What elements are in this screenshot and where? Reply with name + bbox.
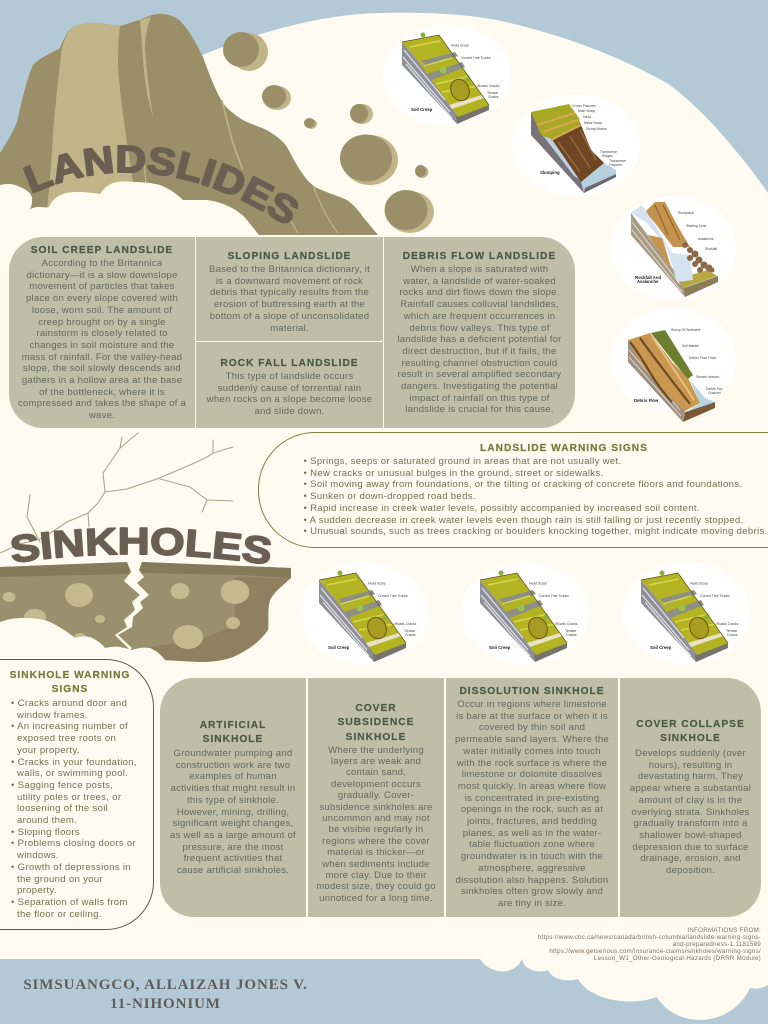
text: sloping: debris that typically results from the	[210, 287, 369, 298]
diagram: soil creep: Soil Creep	[411, 107, 433, 112]
text: dissolution: water initially comes into touch	[463, 746, 601, 757]
heading: cover collapse: COVER COLLAPSE	[636, 719, 745, 730]
text: rock fall: This type of landslide occurs	[226, 371, 353, 382]
list: sinkhole warning signs: utility poles or trees, or	[17, 792, 121, 803]
list: sinkhole warning signs: • Cracks in your foundation,	[11, 757, 137, 768]
text: cover subsidence: be visible regularly in	[329, 824, 423, 835]
diagram: soil creep: Curved Tree Trunks	[461, 56, 491, 60]
text: dissolution: atmosphere, aggressive	[478, 863, 586, 874]
heading: sinkhole warning signs: SIGNS	[52, 684, 88, 695]
text: artificial: However, mining, drilling,	[177, 807, 289, 818]
diagram: rockfall and avalanche: Avalanche	[637, 279, 659, 284]
text: sloping: is a downward movement of rock	[216, 276, 363, 287]
panel: cover subsidence sinkhole	[308, 678, 444, 917]
boulders	[223, 32, 434, 233]
list: sinkhole warning signs: • Separation of walls from	[11, 897, 128, 908]
list: landslide warning signs	[304, 456, 768, 537]
diagram: debris flow: Channel	[708, 391, 721, 395]
diagram: rockfall and avalanche: Rockfall	[705, 247, 717, 251]
text: debris flow	[397, 264, 562, 415]
text: artificial: pressure, are the most	[182, 842, 284, 853]
text: dissolution: planes, as well as in the water-	[463, 828, 601, 839]
text: cover subsidence: when sediments include	[322, 859, 430, 870]
list: sinkhole warning signs: • Sagging fence posts,	[11, 780, 113, 791]
heading: rock fall: ROCK FALL LANDSLIDE	[220, 358, 359, 369]
text: rock fall: and slide down.	[254, 406, 325, 417]
text: dissolution: is concentrated in pre-existing	[465, 793, 599, 804]
heading: artificial: SINKHOLE	[203, 734, 263, 745]
cloud under ground	[0, 618, 170, 670]
diagram: sinkhole block 2: Cracks	[566, 633, 577, 637]
heading: landslide warning signs: LANDSLIDE WARNING SIGNS	[480, 443, 648, 454]
list: landslide warning signs: • Springs, seeps or saturated ground in areas that are not usually wet.	[304, 456, 621, 467]
text: cover subsidence: material is thicker—or	[327, 847, 425, 858]
diagram: slumping: Fissures	[609, 163, 622, 167]
text: author credit: 11-NIHONIUM	[110, 996, 221, 1012]
text: cover subsidence: uncommon and may not	[322, 813, 430, 824]
diagram: sinkhole block 1: Head Scarp	[368, 582, 386, 586]
diagram: sinkhole block 2: Terrace	[565, 629, 576, 633]
diagram: rockfall and avalanche: Snowpack	[678, 211, 694, 215]
panel: rock fall landslide	[196, 342, 383, 428]
list: sinkhole warning signs: walls, or swimming pool.	[17, 768, 128, 779]
diagram: sinkhole block 1: Soil Creep	[328, 645, 350, 650]
list: landslide warning signs: • Rapid increase in creek water levels, possibly accompanied by increased soil content.	[304, 503, 700, 514]
panel: artificial sinkhole	[160, 678, 306, 917]
text: dissolution: sinkholes often grow slowly and	[461, 886, 603, 897]
text: soil creep: loose, worn soil. The amount of	[32, 305, 172, 316]
list: sinkhole warning signs: window frames.	[17, 710, 88, 721]
heading: sinkhole warning signs	[10, 670, 130, 695]
text: dissolution: with the rock surface is where the	[457, 758, 607, 769]
cloud over mountain base	[0, 181, 259, 240]
diagram: sinkhole block 3: Soil Creep	[650, 645, 672, 650]
text: cover subsidence: gradually. Cover-	[338, 790, 414, 801]
illustration: sinkhole ground with cracks and title	[0, 432, 291, 662]
text: rock fall	[206, 371, 372, 417]
text: cover subsidence: layers are weak and	[331, 756, 421, 767]
diagram: sinkhole block 1: Cracks	[405, 633, 416, 637]
text: cover collapse: deposition.	[666, 865, 715, 876]
text: cover collapse: shallower bowl-shaped	[639, 830, 742, 841]
diagram: slumping: Minor Scarp	[584, 121, 602, 125]
diagram: sinkhole block 2: Head Scarp	[529, 582, 547, 586]
text: artificial: frequent activities that	[184, 853, 282, 864]
text: dissolution: permeable sand layers. Where the	[455, 734, 609, 745]
diagrams: four landslide types and three sinkhole blocks	[300, 24, 750, 664]
list: sinkhole warning signs: • An increasing number of	[11, 721, 128, 732]
diagram: soil creep	[383, 24, 511, 126]
diagram: soil creep: Terrace	[487, 91, 498, 95]
diagram: slumping	[512, 94, 640, 196]
text: soil creep: of the bottleneck, where it is	[39, 387, 165, 398]
text: sloping: Based to the Britannica dictionary, it	[209, 264, 370, 275]
diagram: debris flow: Debris Flow	[634, 398, 659, 403]
text: debris flow: water, a landslide of water-soaked	[403, 276, 556, 287]
text: artificial: activities that might result in	[171, 783, 295, 794]
diagram: slumping: Slumping	[540, 170, 560, 175]
heading: cover collapse	[636, 719, 745, 744]
diagram: sinkhole block 1: Terrace	[404, 629, 415, 633]
text: soil creep: movement of particles that takes	[29, 281, 175, 292]
text: cover subsidence: subsidence sinkholes are	[319, 802, 433, 813]
mountain	[0, 14, 378, 235]
text: sources: and-preparedness-1.1181599	[673, 941, 761, 948]
diagram: sinkhole block 3: Terrace	[726, 629, 737, 633]
diagram: soil creep: Roads Cracks	[478, 84, 500, 88]
diagram: sinkhole block 3: Head Scarp	[690, 582, 708, 586]
text: dissolution: Occur in regions where limestone	[457, 699, 607, 710]
diagram: debris flow: Stream Incision	[696, 375, 719, 379]
text: cover collapse: gradually transform into a	[633, 818, 748, 829]
text: author credit	[23, 977, 308, 1012]
text: sources: INFORMATIONS FROM:	[687, 926, 761, 934]
list: sinkhole warning signs	[11, 698, 137, 920]
text: sloping: material.	[270, 323, 309, 334]
heading: cover subsidence	[338, 703, 414, 743]
text: rock fall: when rocks on a slope become loose	[207, 394, 372, 405]
text: rock fall: suddenly cause of torrential rain	[218, 383, 361, 394]
heading: sinkhole warning signs: SINKHOLE WARNING	[10, 670, 130, 680]
title: Sinkholes: SINKHOLES	[11, 527, 271, 564]
diagram: debris flow: Debris Fan	[706, 387, 723, 391]
panel: debris flow landslide	[384, 237, 575, 428]
text: cover collapse: Develops suddenly (over	[635, 748, 746, 759]
text: soil creep: gathers in a hollow area at the base	[22, 375, 182, 386]
list: sinkhole warning signs: your property.	[17, 745, 80, 756]
text: sloping: bottom of a slope of unconsolidated	[210, 311, 369, 322]
text: debris flow: debris flow valleys. This type of	[409, 323, 550, 334]
text: cover collapse: depression due to surface	[632, 842, 749, 853]
diagram: sinkhole block 2	[461, 562, 589, 664]
diagram: slumping: Ridges	[602, 154, 613, 158]
text: sloping: erosion of buttressing earth at the	[214, 299, 365, 310]
text: soil creep: changes in soil moisture and the	[30, 340, 174, 351]
panel: landslide warning signs	[258, 432, 768, 548]
list: sinkhole warning signs: loosening of the soil	[17, 803, 108, 814]
heading: dissolution: DISSOLUTION SINKHOLE	[459, 686, 605, 697]
heading: soil creep: SOIL CREEP LANDSLIDE	[31, 245, 173, 256]
text: dissolution: is bare at the surface or when it is	[456, 711, 608, 722]
diagram: sinkhole block 2: Curved Tree Trunks	[539, 594, 569, 598]
list: sinkhole warning signs: exposed tree roots on	[17, 733, 116, 744]
text: debris flow: resulting channel obstruction could	[402, 358, 557, 369]
heading: artificial	[200, 720, 266, 745]
text: dissolution: groundwater is in touch with the	[461, 851, 603, 862]
text: cover subsidence: contain sand,	[346, 767, 406, 778]
text: dissolution: limestone or dolomite dissolves	[462, 769, 602, 780]
text: artificial: cause artificial sinkholes.	[177, 865, 289, 876]
text: debris flow: result in several amplified secondary	[398, 369, 561, 380]
text: soil creep: creep brought on by a single	[38, 317, 166, 328]
diagram: slumping: Crown Fissures	[572, 104, 596, 108]
text: soil creep: place on every slope covered with	[26, 293, 178, 304]
text: author credit: SIMSUANGCO, ALLAIZAH JONES V.	[23, 977, 308, 993]
diagram: rockfall and avalanche: Starting Zone	[686, 224, 706, 228]
list: sinkhole warning signs: the ground on your	[17, 874, 103, 885]
panel: soil creep landslide	[9, 237, 195, 428]
list: landslide warning signs: • Unusual sounds, such as trees cracking or boulders knocking together, might indicate moving debris.	[304, 526, 768, 537]
text: debris flow: When a slope is saturated with	[411, 264, 548, 275]
diagram: slumping: Head	[583, 115, 591, 119]
text: debris flow: landslide has a deficient potential for	[397, 334, 562, 345]
text: sources: https://www.getserious.com/insurance-claims/sinkholes/warning-signs/	[549, 948, 761, 955]
text: cover collapse: drainage, erosion, and	[640, 853, 741, 864]
heading: cover subsidence: SUBSIDENCE	[338, 717, 414, 728]
title: Landslides: LANDSLIDES	[22, 145, 298, 224]
text: soil creep: rainstorm is closely related to	[36, 328, 168, 339]
heading: cover subsidence: COVER	[355, 703, 397, 714]
diagram: slumping: Transverse	[609, 159, 626, 163]
text: debris flow: impact of rainfall on this type of	[409, 393, 550, 404]
heading: debris flow: DEBRIS FLOW LANDSLIDE	[403, 251, 556, 262]
text: dissolution: covered by thin soil and	[479, 722, 585, 733]
text: debris flow: landslide is crucial for this cause.	[405, 404, 554, 415]
text: artificial	[170, 748, 296, 876]
diagram: rockfall and avalanche: Avalanche	[698, 237, 714, 241]
diagram: sinkhole block 3: Cracks	[727, 633, 738, 637]
diagram: debris flow: Soil Mantle	[682, 344, 699, 348]
ground	[0, 562, 291, 662]
list: sinkhole warning signs: • Problems closing doors or	[11, 838, 136, 849]
heading: cover subsidence: SINKHOLE	[346, 732, 406, 743]
text: artificial: significant weight changes,	[173, 818, 293, 829]
list: sinkhole warning signs: windows.	[17, 850, 59, 861]
text: artificial: Groundwater pumping and	[174, 748, 292, 759]
text: soil creep: dictionary—it is a slow downslope	[26, 270, 178, 281]
diagram: slumping: Main Scarp	[578, 109, 595, 113]
text: sources: Lesson_W1_Other-Geological-Hazards (DRRR Module)	[594, 955, 761, 962]
text: cover subsidence: unnoticed for a long time.	[319, 893, 433, 904]
illustration: landslide mountain with boulders	[0, 14, 434, 235]
text: dissolution: openings in the rock, such as at	[461, 804, 603, 815]
text: cover collapse: overlying strata. Sinkholes	[631, 807, 750, 818]
diagram: sinkhole block 2: Roads Cracks	[556, 622, 578, 626]
list: landslide warning signs: • Sunken or down-dropped road beds.	[304, 491, 476, 502]
text: debris flow: Rainfall causes colluvial landslides,	[400, 299, 559, 310]
text: soil creep: compressed and takes the shape of a	[18, 398, 186, 409]
text: sources: https://www.cbc.ca/news/canada/british-columbia/landslide-warning-signs-	[538, 934, 761, 941]
panel: cover collapse sinkhole	[620, 678, 761, 917]
heading: artificial: ARTIFICIAL	[200, 720, 266, 731]
list: sinkhole warning signs: around them.	[17, 815, 77, 826]
diagram: sinkhole block 1: Curved Tree Trunks	[378, 594, 408, 598]
diagram: sinkhole block 2: Soil Creep	[489, 645, 511, 650]
diagram: debris flow: Slump Of Sediment	[671, 328, 700, 332]
text: cover subsidence: modest size, they could go	[316, 881, 436, 892]
text: debris flow: rocks and dirt flows down the slope.	[399, 287, 560, 298]
diagram: sinkhole block 3: Roads Cracks	[717, 622, 739, 626]
diagram: soil creep: Head Scarp	[451, 44, 469, 48]
panel: dissolution sinkhole	[446, 678, 618, 917]
text: artificial: this type of sinkhole.	[187, 795, 279, 806]
text: soil creep: slope, the soil slowly descends and	[23, 363, 181, 374]
diagram: soil creep: Cracks	[488, 95, 499, 99]
panel: sinkhole warning signs	[0, 659, 154, 930]
text: sources	[538, 926, 761, 962]
text: cover subsidence: Where the underlying	[328, 744, 424, 756]
text: artificial: as well as a large amount of	[170, 830, 296, 841]
diagram: sinkhole block 3: Curved Tree Trunks	[700, 594, 730, 598]
text: dissolution: table fluctuation zone where	[469, 839, 595, 850]
text: dissolution: dissolution also happens. Solution	[456, 875, 608, 886]
list: sinkhole warning signs: property.	[17, 885, 57, 896]
panel: sloping landslide	[196, 237, 383, 341]
text: artificial: construction work are two	[176, 760, 290, 771]
diagram: debris flow	[610, 308, 736, 422]
diagram: sinkhole block 1: Roads Cracks	[395, 622, 417, 626]
list: landslide warning signs: • New cracks or unusual bulges in the ground, street or sidewalks.	[304, 468, 603, 479]
text: debris flow: dangers. Investigating the potential	[401, 381, 558, 392]
diagram: debris flow: Debris Flow Track	[689, 356, 716, 360]
list: landslide warning signs: • Soil moving away from foundations, or the tilting or cracking of concrete floors and foundations.	[304, 479, 742, 490]
text: cover collapse	[630, 748, 751, 876]
heading: cover collapse: SINKHOLE	[660, 733, 721, 744]
text: cover collapse: amount of clay is in the	[639, 795, 742, 806]
text: dissolution: joints, fractures, and bedding	[467, 816, 597, 827]
text: cover subsidence	[316, 744, 436, 904]
text: soil creep: According to the Britannica	[42, 258, 162, 269]
diagram: sinkhole block 1	[300, 562, 428, 664]
diagram: sinkhole block 3	[622, 562, 750, 664]
text: dissolution	[455, 699, 609, 909]
diagram: rockfall and avalanche	[610, 196, 736, 300]
diagram: slumping: Transverse	[600, 150, 617, 154]
text: cover subsidence: regions where the cover	[322, 836, 430, 847]
diagram: rockfall and avalanche: Rockfall And	[635, 275, 661, 280]
text: cover subsidence: more clay. Due to their	[325, 870, 427, 881]
list: sinkhole warning signs: • Growth of depressions in	[11, 862, 131, 873]
text: sloping	[209, 264, 370, 334]
text: soil creep	[18, 258, 186, 421]
text: soil creep: wave.	[89, 410, 115, 421]
text: dissolution: are tiny in size.	[498, 898, 566, 909]
list: sinkhole warning signs: • Cracks around door and	[11, 698, 127, 709]
diagram: slumping: Slump Blocks	[586, 127, 607, 131]
text: cover subsidence: development occurs	[331, 779, 421, 790]
text: cover collapse: hours), resulting in	[649, 760, 732, 771]
text: dissolution: most quickly. In areas where flow	[458, 781, 606, 792]
text: debris flow: direct destruction, but if it fails, the	[402, 346, 557, 357]
list: sinkhole warning signs: the floor or ceiling.	[17, 909, 102, 920]
text: soil creep: mass of rainfall. For the valley-head	[22, 352, 182, 363]
list: landslide warning signs: • A sudden decrease in creek water levels even though rain is still falling or just recently stopped.	[304, 515, 744, 526]
text: debris flow: which are frequent occurrences in	[404, 311, 555, 322]
ground cracks	[0, 433, 233, 553]
text: cover collapse: appear where a substantial	[630, 783, 751, 794]
list: sinkhole warning signs: • Sloping floors	[11, 827, 80, 838]
text: cover collapse: devastating harm. They	[638, 771, 743, 782]
text: artificial: examples of human	[189, 771, 277, 782]
heading: sloping: SLOPING LANDSLIDE	[228, 251, 351, 262]
